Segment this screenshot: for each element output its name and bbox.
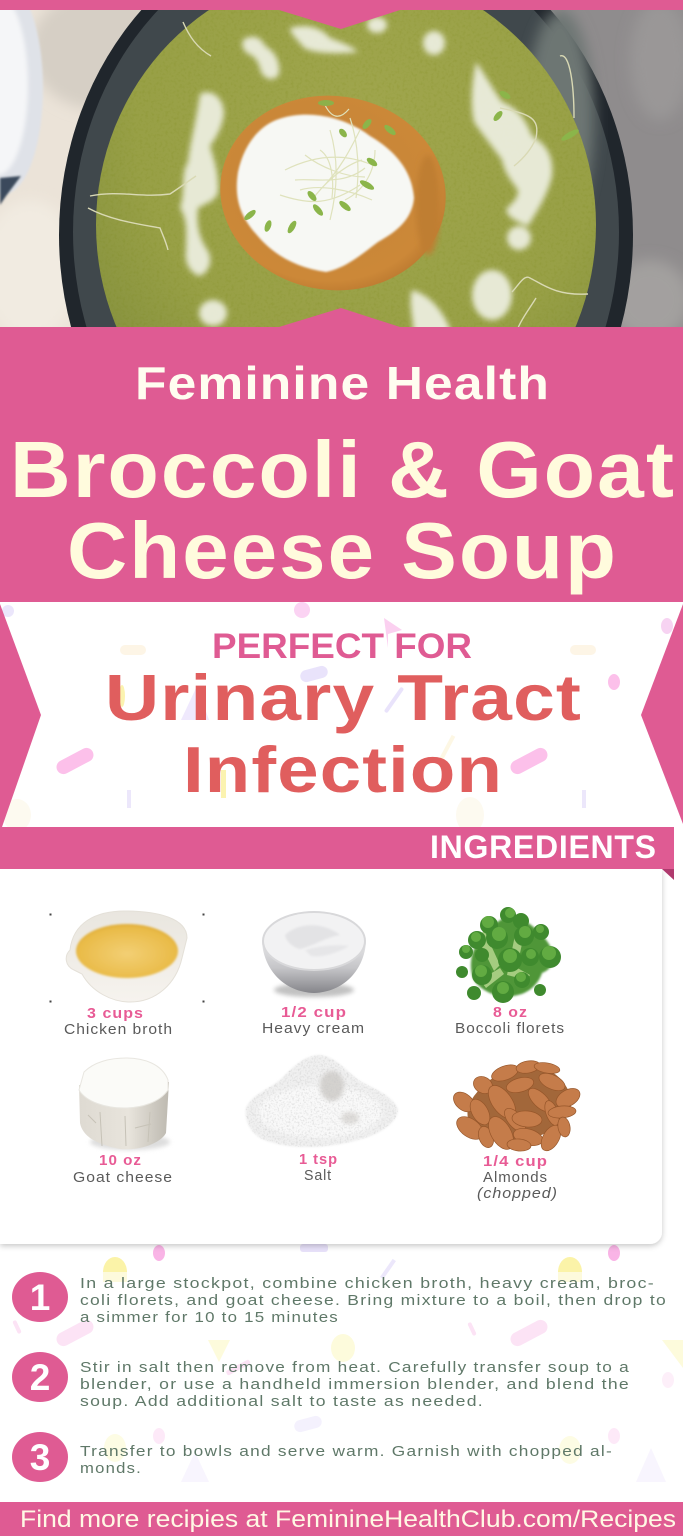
footer text: Find more recipies at FeminineHealthClub.com/Recipes xyxy=(20,1506,676,1533)
confetti pattern: steps area xyxy=(12,1244,683,1482)
label: Salt: Salt xyxy=(304,1168,332,1184)
condition: Urinary Tract Infection xyxy=(105,661,582,806)
icon: goat cheese round xyxy=(79,1058,170,1150)
label: 1/2 cup: 1/2 cup xyxy=(281,1004,347,1021)
label: Chicken broth: Chicken broth xyxy=(64,1022,173,1038)
label: Almonds: Almonds xyxy=(483,1170,548,1186)
ingredients ribbon fold xyxy=(662,869,674,880)
step 3 text: monds. xyxy=(80,1460,142,1477)
icon: almonds xyxy=(450,1059,583,1154)
goat cheese xyxy=(237,115,414,272)
heading: Feminine Health: Feminine Health xyxy=(135,357,550,409)
title: Broccoli & Goat Cheese Soup: Cheese Soup xyxy=(67,506,618,595)
ingredient: salt xyxy=(246,1055,398,1184)
confetti pattern: banner xyxy=(2,602,673,833)
condition: Urinary Tract Infection: Infection xyxy=(183,733,503,806)
label: 8 oz: 8 oz xyxy=(493,1004,528,1021)
condition: Urinary Tract Infection: Urinary Tract xyxy=(105,661,582,734)
step 2 text: blender, or use a handheld immersion blender, and blend the xyxy=(80,1376,630,1393)
ingredient: broccoli florets xyxy=(455,907,565,1037)
step 3 text xyxy=(80,1443,613,1477)
label: 10 oz: 10 oz xyxy=(99,1152,142,1169)
number badge 2: 2 xyxy=(30,1357,50,1398)
step 2 text: soup. Add additional salt to taste as needed. xyxy=(80,1393,484,1410)
step 2 text: Stir in salt then remove from heat. Carefully transfer soup to a xyxy=(80,1359,630,1376)
step 1 xyxy=(12,1272,667,1326)
label: 1 tsp: 1 tsp xyxy=(299,1151,338,1168)
pink title panel xyxy=(0,308,683,602)
subheading: Perfect for: PERFECT FOR xyxy=(212,627,472,666)
title: Broccoli & Goat Cheese Soup: Broccoli & Goat xyxy=(10,425,676,514)
hero photo: bowl of broccoli soup xyxy=(0,10,683,327)
soup texture xyxy=(104,12,592,327)
icon: bowl of broth xyxy=(50,911,204,1002)
label: Heavy cream: Heavy cream xyxy=(262,1021,365,1037)
number badge 2 xyxy=(12,1352,68,1402)
label: 1/4 cup: 1/4 cup xyxy=(483,1153,548,1170)
step 1 text: In a large stockpot, combine chicken broth, heavy cream, broc- xyxy=(80,1275,655,1292)
top pink band with notch xyxy=(0,0,683,29)
cream swirls xyxy=(180,17,552,336)
number badge 3: 3 xyxy=(30,1437,50,1478)
label: Goat cheese: Goat cheese xyxy=(73,1170,173,1186)
heading: Ingredients: INGREDIENTS xyxy=(430,829,656,865)
banner ribbon ends xyxy=(0,604,683,827)
bowl rim xyxy=(59,10,633,327)
footer band xyxy=(0,1502,683,1536)
sprout threads xyxy=(88,22,588,328)
ingredient: almonds xyxy=(450,1059,583,1202)
label: 3 cups: 3 cups xyxy=(87,1005,144,1022)
number badge 1: 1 xyxy=(30,1277,50,1318)
label: (chopped): (chopped) xyxy=(477,1186,558,1202)
alfalfa sprouts xyxy=(243,89,580,235)
number badge 1 xyxy=(12,1272,68,1322)
ingredients ribbon xyxy=(0,827,674,869)
icon: broccoli xyxy=(456,907,561,1003)
panel: ingredients card xyxy=(0,869,662,1244)
step 2 xyxy=(12,1352,630,1410)
label: Boccoli florets: Boccoli florets xyxy=(455,1021,565,1037)
spoon xyxy=(0,0,43,205)
title: Broccoli & Goat Cheese Soup xyxy=(10,425,676,595)
icon: bowl of cream xyxy=(262,911,366,997)
ingredient: heavy cream xyxy=(262,911,366,1037)
number badge 3 xyxy=(12,1432,68,1482)
ingredient: goat cheese xyxy=(73,1058,173,1186)
step 2 text xyxy=(80,1359,630,1410)
step 1 text: coli florets, and goat cheese. Bring mixture to a boil, then drop to xyxy=(80,1292,667,1309)
step 3 xyxy=(12,1432,613,1482)
step 1 text xyxy=(80,1275,667,1326)
toast xyxy=(220,96,446,290)
step 3 text: Transfer to bowls and serve warm. Garnish with chopped al- xyxy=(80,1443,613,1460)
ingredient: chicken broth xyxy=(50,911,204,1038)
icon: salt pile xyxy=(246,1055,398,1147)
step 1 text: a simmer for 10 to 15 minutes xyxy=(80,1309,339,1326)
